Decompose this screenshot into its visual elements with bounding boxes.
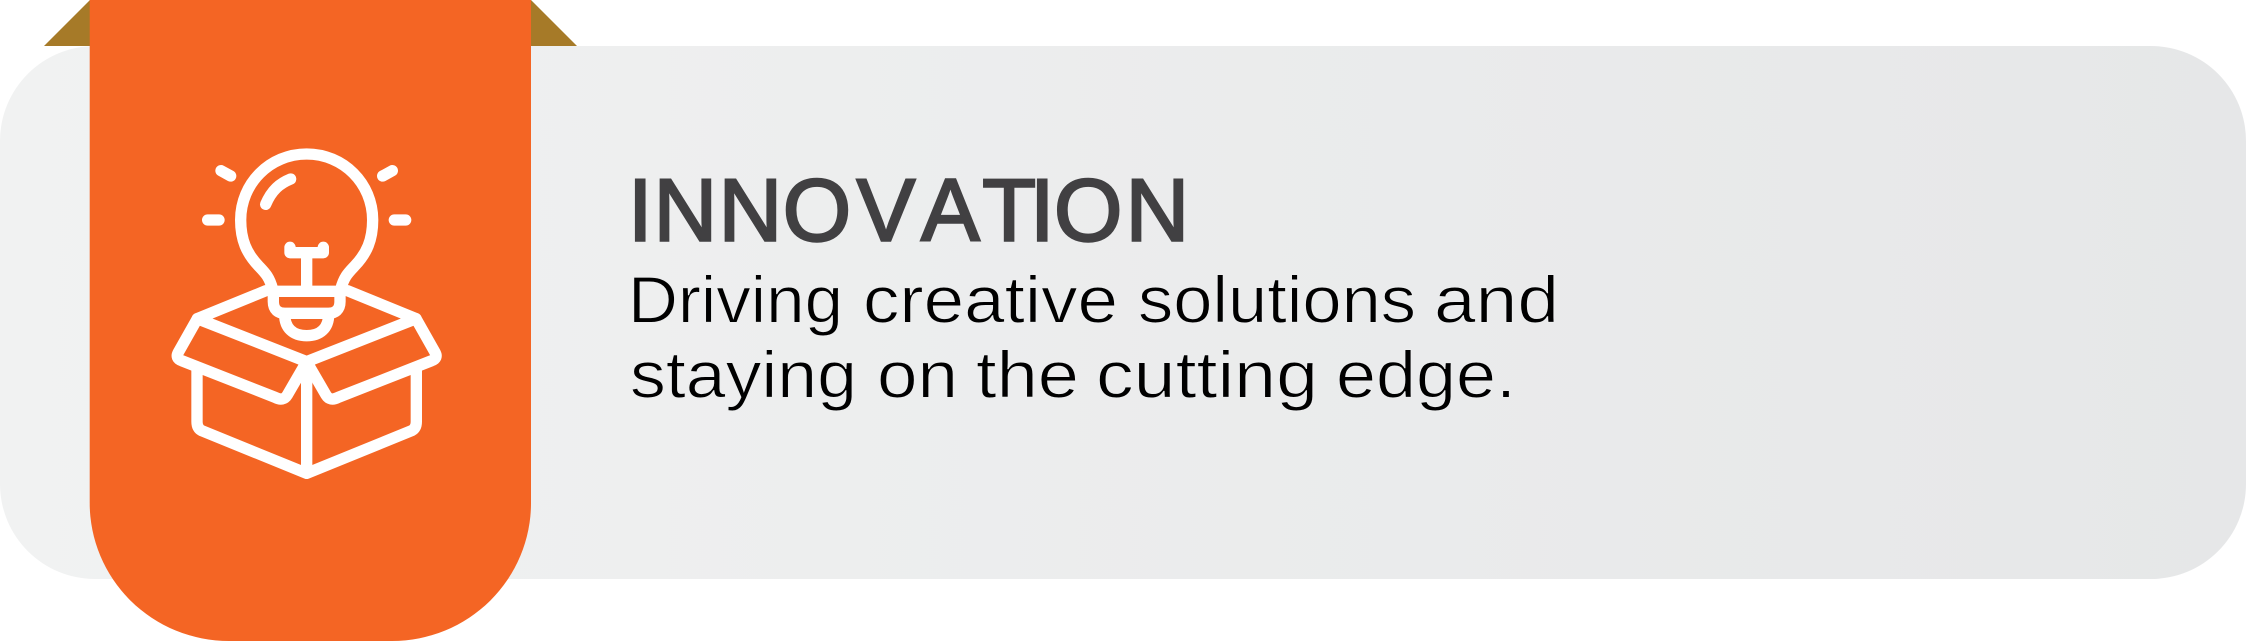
icon: light bulb rising from open box xyxy=(177,154,436,473)
description line 1 xyxy=(628,263,1559,337)
icon part: light rays xyxy=(208,171,406,220)
description line 2 xyxy=(630,337,1516,411)
ribbon fold: right triangle xyxy=(531,0,577,46)
description line 1: Driving xyxy=(628,263,843,337)
description line 2: edge. xyxy=(1336,337,1516,411)
ribbon fold: left triangle xyxy=(44,0,90,46)
description line 1: solutions xyxy=(1138,263,1416,337)
description line 2: the xyxy=(976,337,1079,411)
description line 1: creative xyxy=(863,263,1118,337)
text block: description xyxy=(628,263,1559,411)
icon part: box back edges xyxy=(197,291,416,362)
icon part: bulb highlight xyxy=(266,179,291,204)
description line 2: on xyxy=(877,337,958,411)
panel: orange ribbon xyxy=(90,0,531,641)
description line 2: cutting xyxy=(1096,337,1318,411)
icon part: filament xyxy=(290,247,323,291)
icon part: bulb base xyxy=(273,291,340,336)
title: INNOVATION xyxy=(628,161,1189,260)
icon part: box body xyxy=(197,367,416,473)
icon part: right flap xyxy=(307,319,436,399)
icon part: left flap xyxy=(177,319,307,399)
icon part: bulb glass xyxy=(241,154,373,289)
description line 1: and xyxy=(1434,263,1559,337)
description line 2: staying xyxy=(630,337,857,411)
